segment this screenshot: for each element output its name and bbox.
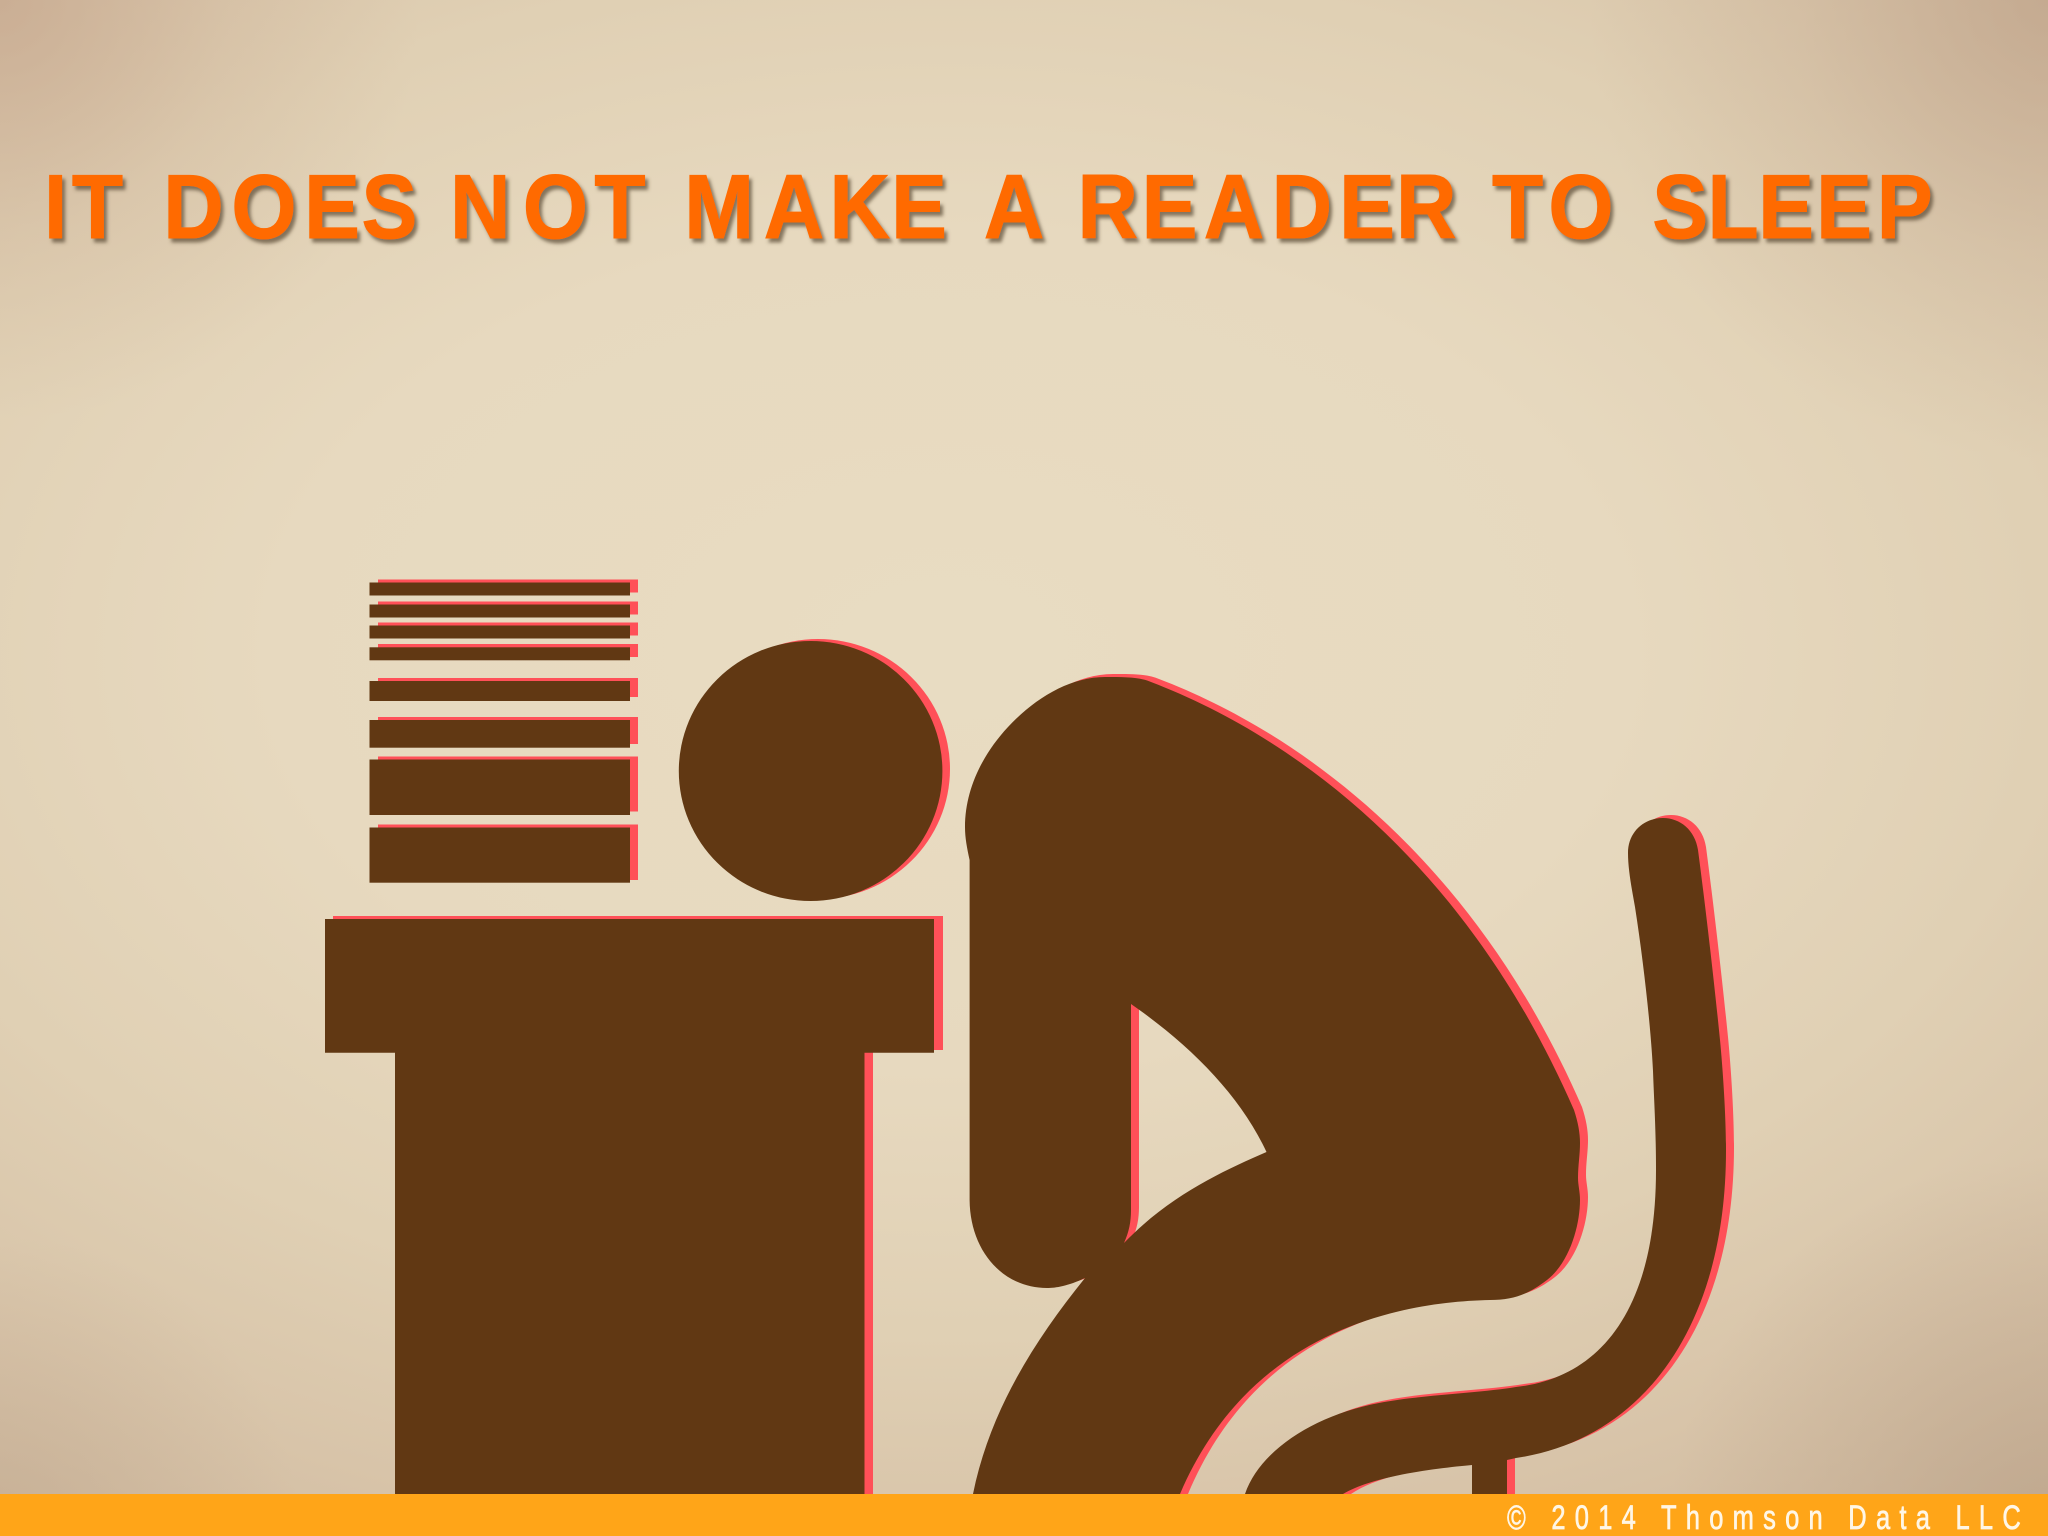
book 6 <box>370 717 638 748</box>
title: MAKE <box>684 156 947 258</box>
title: IT <box>44 156 123 258</box>
title: TO <box>1492 156 1613 258</box>
title <box>44 156 1933 258</box>
title: READER <box>1078 156 1456 258</box>
icon: head resting on desk <box>679 639 950 901</box>
title: SLEEP <box>1652 156 1933 258</box>
copyright text: © 2014 Thomson Data LLC <box>1507 1500 2021 1536</box>
title: DOES <box>163 156 417 258</box>
icon: chair <box>1245 815 1734 1494</box>
book 4 <box>370 644 638 660</box>
book 7 <box>370 756 638 815</box>
book 2 <box>370 602 638 618</box>
book 5 <box>370 678 638 701</box>
icon: slumped person body <box>965 674 1588 1494</box>
footer bar <box>0 1494 2048 1536</box>
book 8 <box>370 824 638 883</box>
icon: desk <box>325 916 943 1494</box>
title: NOT <box>450 156 646 258</box>
title: A <box>984 156 1044 258</box>
icon: stack of books <box>370 580 638 883</box>
book 1 <box>370 580 638 596</box>
book 3 <box>370 622 638 638</box>
